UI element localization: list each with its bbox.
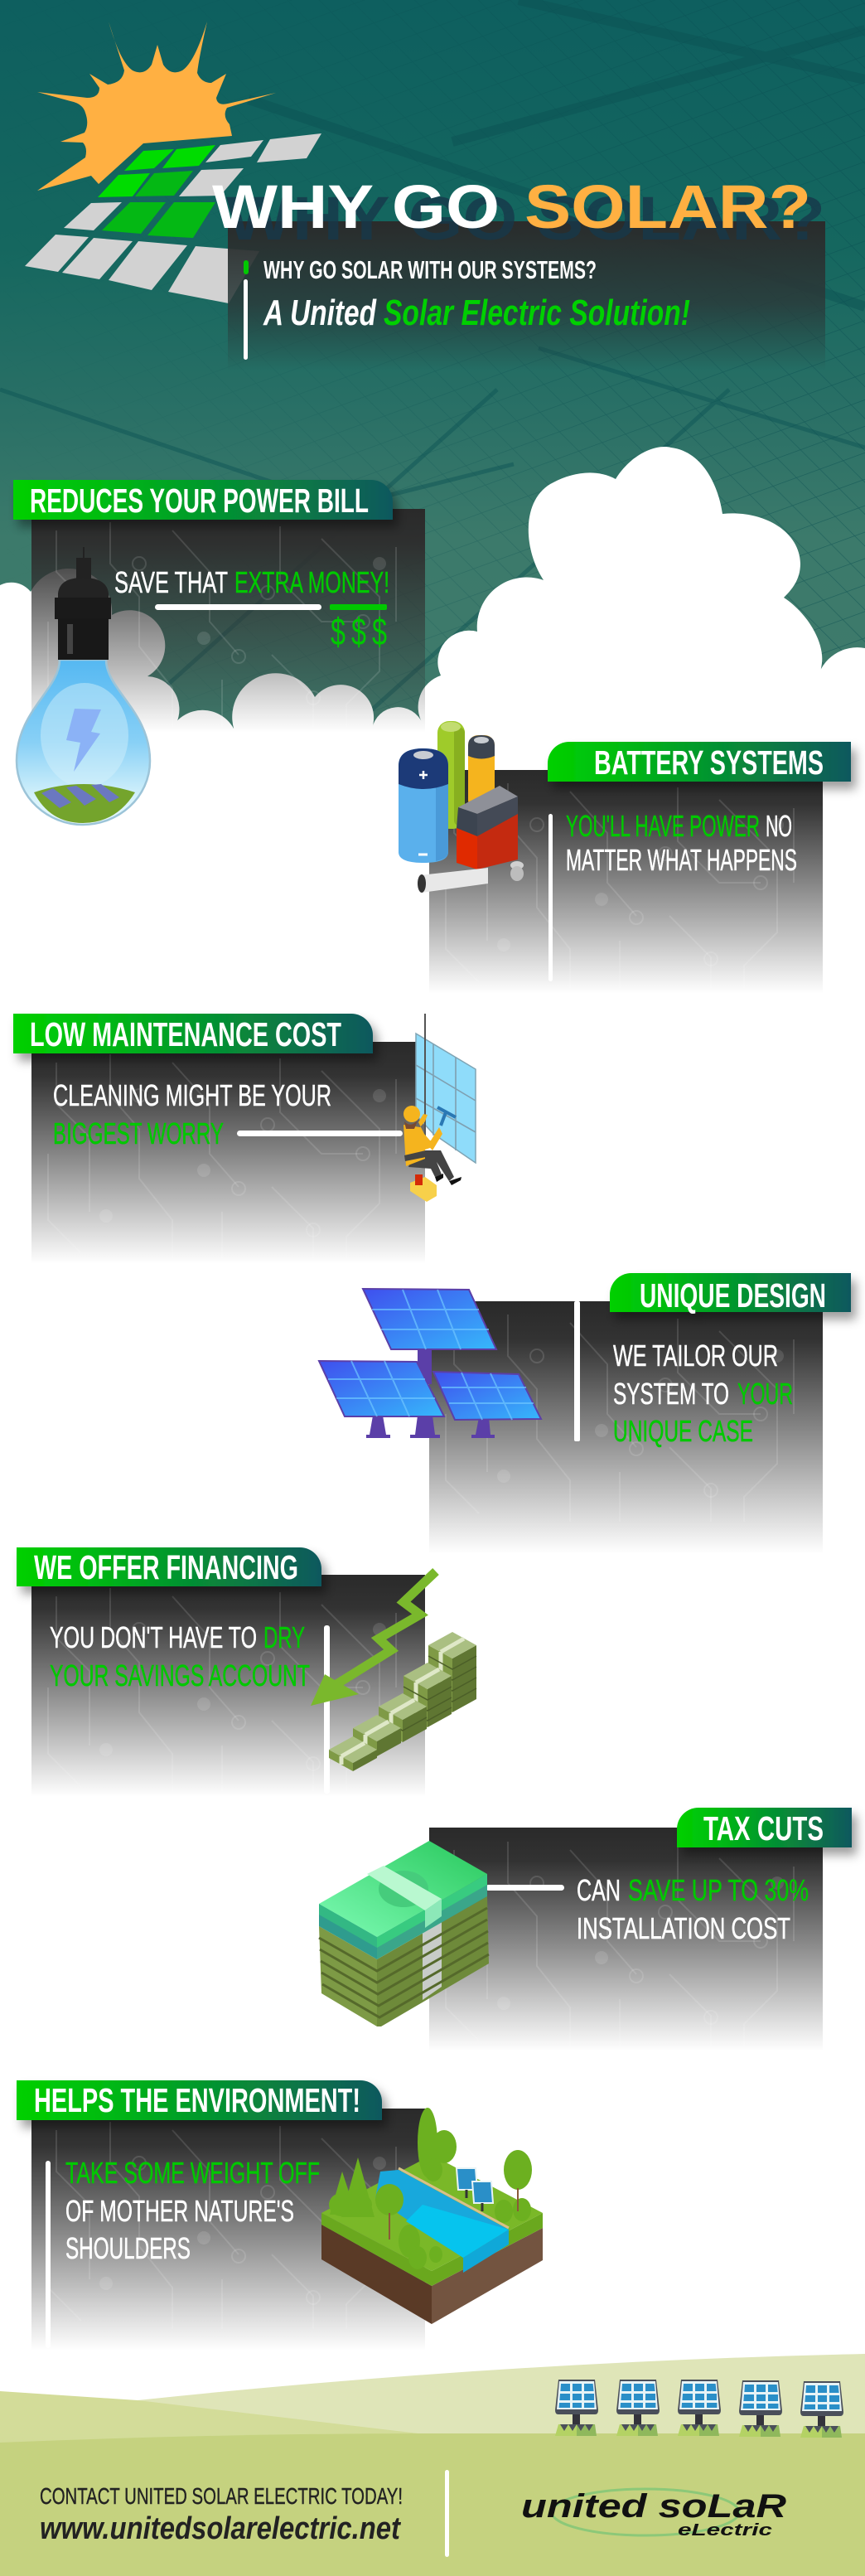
icon: mini solar panel 1 xyxy=(555,2380,598,2436)
panel text: save that extra money: EXTRA MONEY! xyxy=(234,565,389,599)
stack 5 xyxy=(428,1632,476,1712)
panel text: save that extra money: SAVE THAT xyxy=(114,565,228,599)
panel text: mother nature: OF MOTHER NATURE'S xyxy=(65,2194,294,2228)
panel text: save up to 30%: CAN xyxy=(577,1873,621,1907)
stack 2 xyxy=(353,1715,401,1756)
panel text: dry savings: YOU DON'T HAVE TO xyxy=(50,1620,257,1654)
icon: light bulb with solar field xyxy=(17,547,150,825)
stack 4 xyxy=(404,1663,452,1727)
connector bar xyxy=(237,1131,403,1136)
panel text: dry savings: DRY xyxy=(263,1620,305,1654)
main title: why go solar: WHY GO SOLAR? xyxy=(226,184,825,253)
panel text: we tailor: SYSTEM TO xyxy=(613,1377,729,1411)
stack 3 xyxy=(379,1693,427,1742)
panel: unique design xyxy=(429,1301,823,1554)
panel text: we tailor: WE TAILOR OUR xyxy=(613,1339,778,1373)
panel text: cleaning xyxy=(53,1078,331,1150)
company logo: united soLaR xyxy=(521,2488,786,2525)
company logo: eLectric xyxy=(678,2521,772,2540)
subtitle text: WHY GO SOLAR WITH OUR SYSTEMS? xyxy=(263,255,597,284)
panel: tax cuts xyxy=(429,1828,823,2051)
main title: why go solar: WHY GO xyxy=(212,172,500,241)
icon: solar panels xyxy=(319,1289,541,1438)
panel text: mother nature xyxy=(65,2156,320,2265)
panel text: cleaning: BIGGEST WORRY xyxy=(53,1116,224,1150)
divider bar xyxy=(548,814,553,981)
panel text: you'll have power: NO xyxy=(766,809,792,843)
panel: helps the environment xyxy=(31,2109,425,2351)
header dark box xyxy=(228,221,825,370)
divider bar xyxy=(324,1625,330,1794)
icon: window cleaner xyxy=(404,1014,476,1202)
panel text: you'll have power xyxy=(566,809,797,877)
sun xyxy=(37,22,276,191)
panel text: we tailor xyxy=(613,1339,793,1448)
icon: money stacks xyxy=(329,1632,476,1771)
panel text: save that extra money: $ xyxy=(351,610,366,653)
subtitle accent bar xyxy=(244,260,249,360)
main title: why go solar: SOLAR? xyxy=(524,172,811,241)
icon: mini solar panel 3 xyxy=(678,2380,721,2436)
panel text: save that extra money: $ xyxy=(331,610,346,653)
panel text: save up to 30% xyxy=(577,1873,809,1945)
icon: mini solar panel 2 xyxy=(616,2380,660,2436)
panel text: save that extra money: $ xyxy=(372,610,387,653)
logo solar panel cells xyxy=(25,133,321,303)
section heading: we offer financing: WE OFFER FINANCING xyxy=(34,1548,298,1586)
panel: we offer financing xyxy=(31,1575,425,1797)
clouds xyxy=(0,447,865,1077)
divider bar xyxy=(574,1301,580,1441)
divider bar xyxy=(46,2161,51,2348)
section heading: reduces your power bill: REDUCES YOUR POWER BILL xyxy=(30,482,369,520)
panel text: we tailor: UNIQUE CASE xyxy=(613,1414,753,1448)
icon: cash stack xyxy=(319,1841,489,2026)
panel text: dry savings xyxy=(50,1620,310,1692)
company logo xyxy=(521,2488,786,2540)
panel text: we tailor: YOUR xyxy=(737,1377,793,1411)
connector bar xyxy=(486,1885,564,1891)
panel text: dry savings: YOUR SAVINGS ACCOUNT xyxy=(50,1658,310,1692)
icon: falling arrow xyxy=(311,1571,436,1706)
icon: mini solar panel 4 xyxy=(739,2380,782,2437)
icon: mini solar panel 5 xyxy=(800,2381,843,2438)
panel text: cleaning: CLEANING MIGHT BE YOUR xyxy=(53,1078,331,1112)
panel text: save that extra money xyxy=(114,565,389,653)
icon: landscape with river xyxy=(321,2108,543,2324)
subtitle text: Solar Electric Solution! xyxy=(384,293,690,333)
subtitle text: A United xyxy=(263,293,377,333)
footer hills xyxy=(0,2354,865,2576)
panel: battery systems xyxy=(429,770,823,994)
panel text: save up to 30%: SAVE UP TO 30% xyxy=(628,1873,809,1907)
panel: low maintenance cost xyxy=(31,1042,425,1264)
section heading: helps the environment: HELPS THE ENVIRONMENT! xyxy=(34,2081,360,2119)
footer divider xyxy=(445,2470,449,2557)
footer contact text xyxy=(40,2483,403,2546)
section heading: reduces your power bill xyxy=(13,480,393,520)
icon: batteries xyxy=(399,721,524,893)
subtitle text xyxy=(263,255,690,333)
stack 1 xyxy=(329,1736,377,1771)
panel text: mother nature: SHOULDERS xyxy=(65,2231,191,2265)
footer contact text: CONTACT UNITED SOLAR ELECTRIC TODAY! xyxy=(40,2483,403,2509)
panel: reduces your power bill xyxy=(31,509,425,733)
section heading: low maintenance cost: LOW MAINTENANCE COST xyxy=(30,1015,341,1053)
header background: solar field photo xyxy=(0,0,865,729)
panel text: mother nature: TAKE SOME WEIGHT OFF xyxy=(65,2156,320,2190)
footer contact text: www.unitedsolarelectric.net xyxy=(40,2511,401,2546)
